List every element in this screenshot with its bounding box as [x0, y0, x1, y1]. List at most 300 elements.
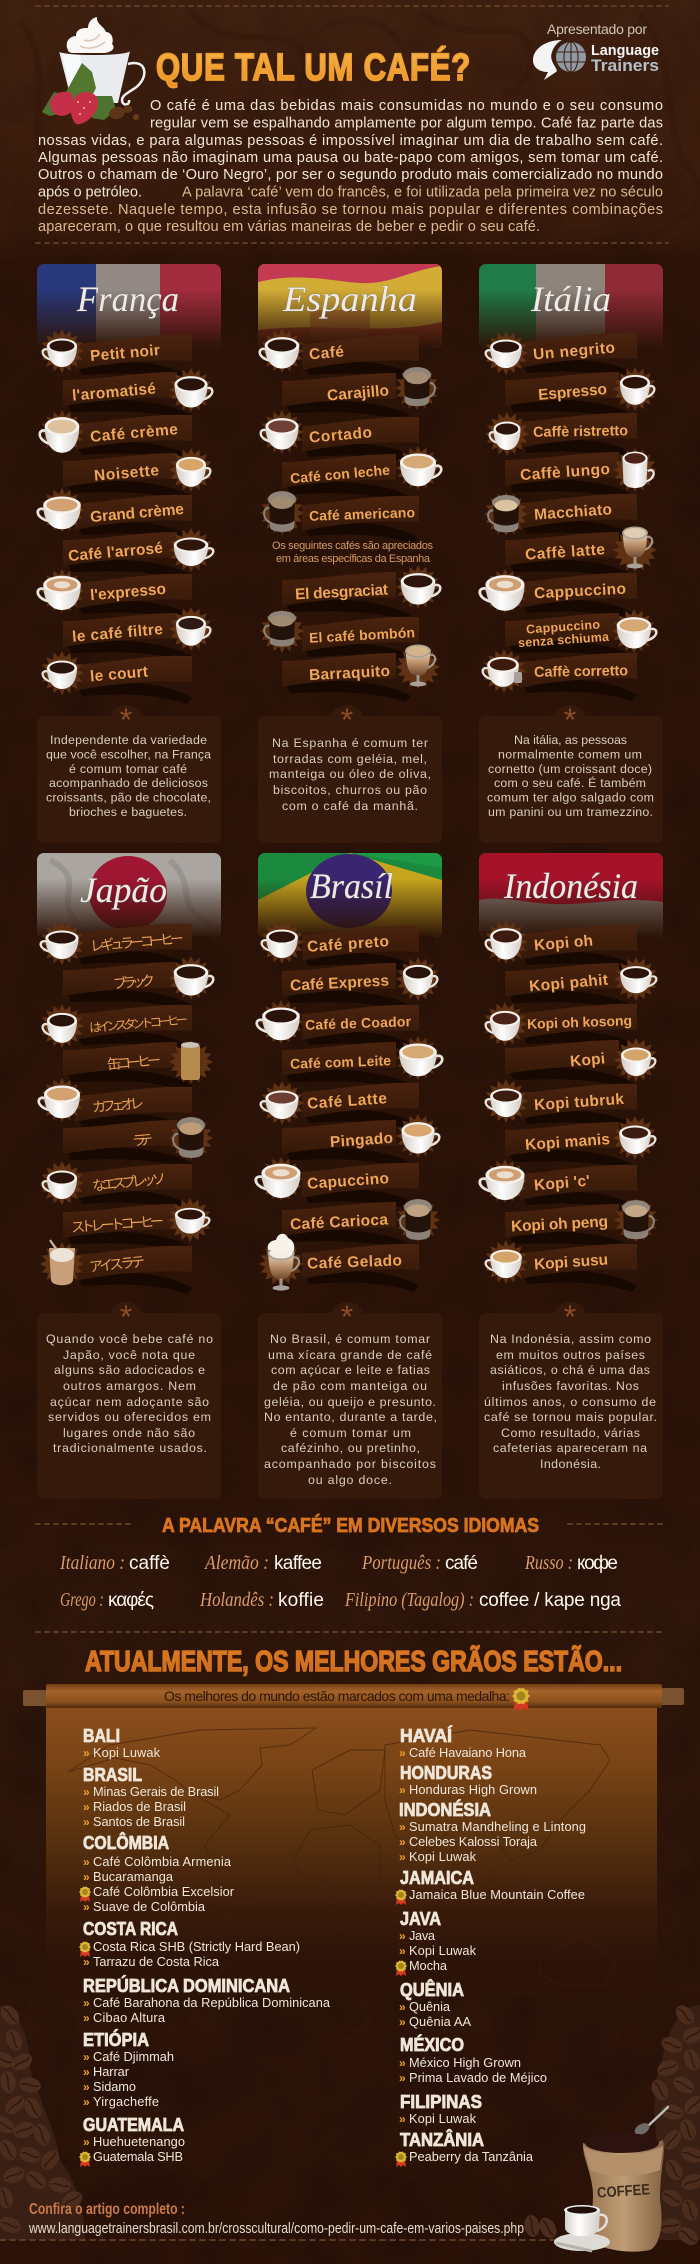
- list: left column: »: [83, 1996, 90, 2010]
- world map outline: [68, 1728, 616, 1985]
- list: left column: Costa Rica SHB (Strictly Hard Bean): [93, 1939, 300, 1954]
- list: left column: Huehuetenango: [93, 2134, 185, 2149]
- intro text: A palavra ‘café’ vem do francês, e foi utilizada pela primeira vez no século: [182, 184, 663, 200]
- list: left column: Santos de Brasil: [93, 1814, 185, 1829]
- note: cafés regionais da Espanha: [272, 540, 434, 565]
- description box: Indonésia: [479, 1299, 663, 1499]
- row: Cortado: Cortado: [308, 424, 373, 447]
- description box: Brasil: cafézinho, ou pretinho,: [281, 1441, 420, 1455]
- row: Café Latte: [260, 1081, 419, 1131]
- list: left column: GUATEMALA: [83, 2115, 184, 2135]
- description box: Japão: *: [120, 1299, 132, 1335]
- word list: café in other languages: café: [445, 1553, 478, 1574]
- row: アイス ラテ: アイス ラテ: [88, 1253, 146, 1275]
- description box: Brasil: No entanto, durante a tarde,: [264, 1410, 437, 1424]
- list: right column: Celebes Kalossi Toraja: [409, 1834, 538, 1849]
- list: right column: »: [399, 1929, 406, 1943]
- note: cafés regionais da Espanha: Os seguintes cafés são apreciados: [272, 540, 434, 552]
- word list: café in other languages: [59, 1552, 621, 1611]
- word list: café in other languages: кофе: [577, 1553, 618, 1574]
- sponsor label: Apresentado por: [547, 21, 647, 37]
- description box: Indonésia: café se tornou mais popular.: [484, 1410, 657, 1424]
- row: Kopi pahit: Kopi pahit: [528, 972, 609, 995]
- list: right column: Peaberry da Tanzânia: [409, 2149, 534, 2164]
- word list: café in other languages: Russo :: [524, 1552, 573, 1574]
- icon: coffee cup with cream and strawberries: [42, 17, 144, 124]
- row: Café Carioca: Café Carioca: [290, 1211, 389, 1234]
- row: Café: Café: [308, 343, 345, 363]
- list: left column: Harrar: [93, 2064, 130, 2079]
- word list: café in other languages: Italiano :: [59, 1552, 125, 1574]
- row: Caffè corretto: Caffè corretto: [534, 663, 628, 681]
- row: Kopi manis: [505, 1116, 657, 1171]
- list: right column: »: [399, 2056, 406, 2070]
- list: right column: »: [399, 1746, 406, 1760]
- panel: Indonésia: [479, 853, 663, 1499]
- row: ブラック: [63, 956, 213, 1011]
- row: Cappuccino: Cappuccino: [534, 581, 626, 602]
- row: Capuccino: [256, 1157, 419, 1211]
- description box: Indonésia: asiáticos, o chá é uma das: [490, 1363, 650, 1377]
- call to action: Confira o artigo completo :: [29, 2201, 185, 2218]
- row: カフェオレ: [39, 1078, 192, 1135]
- row: Café con leche: [282, 446, 441, 503]
- row: le court: le court: [89, 664, 149, 685]
- description box: Brasil: é comum tomar um: [290, 1426, 411, 1440]
- row: Café Latte: Café Latte: [307, 1090, 388, 1113]
- list: right column: MÉXICO: [400, 2034, 464, 2055]
- word list: café in other languages: coffee / kape nga: [479, 1590, 621, 1611]
- description box: Itália: normalmente comem um: [498, 748, 642, 762]
- word list: café in other languages: kaffee: [274, 1553, 322, 1574]
- list: right column: »: [399, 2000, 406, 2014]
- list: right column: [395, 1725, 586, 2167]
- description box: Brasil: [258, 1299, 442, 1499]
- row: Café de Coador: Café de Coador: [305, 1013, 412, 1033]
- description box: Espanha: Na Espanha é comum ter: [272, 736, 428, 750]
- icon: medal: [512, 1688, 530, 1711]
- row: Grand crème: Grand crème: [89, 501, 185, 526]
- row: El desgraciat: El desgraciat: [295, 582, 388, 603]
- intro text: Algumas pessoas não imaginam uma pausa ou bate-papo com amigos, sem tomar um café.: [38, 150, 663, 166]
- row: Café com Leite: [282, 1036, 442, 1091]
- panel: Japão: [37, 853, 221, 1499]
- list: left column: Café Djimmah: [93, 2049, 174, 2064]
- list: right column: HONDURAS: [400, 1763, 492, 1783]
- list: left column: »: [83, 1800, 90, 1814]
- list: right column: Kopi Luwak: [409, 1849, 477, 1864]
- row: 缶コーヒー: [63, 1040, 213, 1091]
- row: レギュラーコーヒー: [40, 921, 192, 972]
- list: right column: Kopi Luwak: [409, 2111, 477, 2126]
- description box: França: que você escolher, na França: [46, 748, 211, 762]
- list: left column: REPÚBLICA DOMINICANA: [83, 1975, 290, 1996]
- row: Capuccino: Capuccino: [307, 1170, 390, 1193]
- icon: coffee cup on saucer: [554, 2205, 610, 2251]
- description box: Japão: outros amargos. Nem: [63, 1379, 196, 1393]
- row: Espresso: [505, 367, 657, 421]
- word list: café in other languages: Grego :: [60, 1589, 104, 1611]
- scroll with world map: [23, 1684, 684, 1996]
- intro text: nossas vidas, e para algumas pessoas é impossível imaginar um dia de trabalho sem café.: [38, 133, 663, 149]
- row: Petit noir: [40, 329, 192, 383]
- coffee beans: right pile: [523, 2002, 700, 2249]
- description box: Indonésia: Como resultado, várias: [501, 1426, 640, 1440]
- description box: Itália: um panini ou um tramezzino.: [488, 805, 653, 819]
- row: Café: [260, 329, 419, 383]
- description box: França: brioches e baguetes.: [69, 805, 187, 819]
- row: Kopi: Kopi: [569, 1050, 606, 1070]
- list: left column: [79, 1726, 331, 2167]
- row: Kopi oh kosong: [483, 1002, 637, 1052]
- word list: café in other languages: Português :: [361, 1552, 441, 1574]
- row: Café l'arrosé: [63, 528, 213, 581]
- row: Café crème: Café crème: [89, 421, 179, 446]
- row: Caffè corretto: [482, 649, 637, 701]
- description box: Japão: lugares onde não são: [63, 1426, 195, 1440]
- flag: Brasil: [258, 853, 442, 937]
- list: left column: Guatemala SHB: [93, 2149, 183, 2164]
- row: Petit noir: Petit noir: [89, 342, 161, 365]
- list: right column: Honduras High Grown: [409, 1782, 537, 1797]
- list: right column: »: [399, 2015, 406, 2029]
- list: left column: »: [83, 2011, 90, 2025]
- heading: Espanha: Espanha: [282, 279, 417, 319]
- description box: Espanha: manteiga ou óleo de oliva,: [269, 767, 431, 781]
- word list: café in other languages: Alemão :: [203, 1552, 269, 1574]
- description box: Japão: Quando você bebe café no: [46, 1332, 213, 1346]
- description box: Itália: [479, 702, 663, 843]
- word list: café in other languages: koffie: [278, 1590, 324, 1611]
- row: なエスプレッソ: [40, 1161, 192, 1212]
- list: right column: Sumatra Mandheling e Lintong: [409, 1819, 586, 1834]
- row: ラテ: ラテ: [131, 1131, 154, 1149]
- dotted line: header top: [36, 5, 668, 7]
- list: right column: »: [399, 1783, 406, 1797]
- list: left column: Café Colômbia Armenia: [93, 1854, 232, 1869]
- description box: Indonésia: últimos anos, o consumo de: [484, 1395, 656, 1409]
- list: left column: »: [83, 1955, 90, 1969]
- row: Café preto: [260, 920, 419, 974]
- row: Caffè ristretto: [485, 412, 637, 461]
- description box: Indonésia: Na Indonésia, assim como: [490, 1332, 651, 1346]
- heading: Brasil: Brasíl: [310, 866, 393, 906]
- row: Café Gelado: Café Gelado: [307, 1252, 402, 1273]
- row: Carajillo: Carajillo: [326, 382, 390, 405]
- heading: França: França: [76, 279, 179, 319]
- logo: Language Trainers: Language: [591, 42, 659, 59]
- coffee beans: left pile: [0, 2002, 85, 2240]
- row: Café americano: Café americano: [309, 504, 415, 524]
- word list: café in other languages: Holandês :: [199, 1589, 274, 1611]
- scroll caption: Os melhores do mundo estão marcados com uma medalha:: [164, 1688, 510, 1704]
- intro text: regular vem se espalhando amplamente por algum tempo. Café faz parte das: [150, 116, 663, 132]
- flag: França: [37, 264, 221, 348]
- row: le café filtre: le café filtre: [71, 621, 164, 646]
- word list: café in other languages: caffè: [129, 1553, 170, 1574]
- list: right column: QUÊNIA: [400, 1979, 464, 2000]
- row: ストレートコーヒー: ストレートコーヒー: [71, 1213, 164, 1235]
- list: right column: Prima Lavado de Méjico: [409, 2070, 547, 2085]
- list: left column: »: [83, 1855, 90, 1869]
- row: なエスプレッソ: なエスプレッソ: [91, 1170, 167, 1194]
- row: Grand crème: [38, 488, 192, 543]
- list: left column: »: [83, 1785, 90, 1799]
- row: Kopi 'c': [480, 1159, 637, 1213]
- description box: Japão: açúcar nem adoçante são: [50, 1395, 209, 1409]
- row: Pingado: [282, 1114, 440, 1169]
- row: Kopi oh peng: Kopi oh peng: [511, 1213, 608, 1235]
- row: Café con leche: Café con leche: [289, 462, 391, 486]
- description box: Japão: alguns são adocicados e: [54, 1363, 205, 1377]
- list: left column: Riados de Brasil: [93, 1799, 186, 1814]
- list: left column: »: [83, 2065, 90, 2079]
- row: Caffè latte: [505, 526, 657, 581]
- panel: França: [37, 264, 221, 843]
- row: Noisette: [63, 448, 213, 502]
- row: Cappuccino senza schiuma: [505, 609, 656, 662]
- description box: França: Independente da variedade: [50, 733, 207, 747]
- row: Noisette: Noisette: [93, 462, 160, 485]
- description box: Brasil: uma xícara grande de café: [268, 1348, 432, 1362]
- description box: Indonésia: infusões favoritas. Nos: [502, 1379, 639, 1393]
- title: QUE TAL UM CAFÉ?: [156, 45, 471, 89]
- row: Espresso: Espresso: [537, 381, 608, 404]
- flag: Indonésia: [479, 853, 663, 937]
- list: left column: »: [83, 2135, 90, 2149]
- row: ブラック: ブラック: [112, 972, 156, 992]
- description box: Brasil: com açúcar e leite e fatias: [271, 1363, 430, 1377]
- description box: França: acompanhado de deliciosos: [49, 776, 208, 790]
- icon: coffee sack: [583, 2107, 668, 2252]
- list: left column: »: [83, 1815, 90, 1829]
- word list: café in other languages: καφές: [108, 1590, 154, 1611]
- row: Macchiato: Macchiato: [534, 501, 613, 524]
- list: left column: Sidamo: [93, 2079, 136, 2094]
- row: Café Gelado: [259, 1234, 419, 1292]
- heading: Indonésia: Indonésia: [503, 866, 638, 906]
- row: Café de Coador: [257, 1000, 419, 1053]
- row: Kopi pahit: [505, 957, 658, 1012]
- row: ラテ: [63, 1116, 213, 1169]
- list: right column: »: [399, 1850, 406, 1864]
- description box: Itália: com o seu café. É também: [494, 775, 646, 790]
- description box: Espanha: [258, 702, 442, 843]
- row: Macchiato: [484, 492, 637, 542]
- list: left column: Café Barahona da República Dominicana: [93, 1995, 331, 2010]
- row: Barraquito: [282, 644, 440, 702]
- row: El café bombón: El café bombón: [309, 624, 415, 646]
- list: left column: Tarrazu de Costa Rica: [93, 1954, 220, 1969]
- list: right column: México High Grown: [409, 2055, 521, 2070]
- list: left column: »: [83, 1900, 90, 1914]
- list: right column: Café Havaiano Hona: [409, 1745, 527, 1760]
- logo: Language Trainers: [533, 40, 659, 80]
- list: right column: »: [399, 1820, 406, 1834]
- row: l'expresso: [38, 569, 192, 622]
- row: l'aromatisé: [63, 368, 213, 421]
- note: cafés regionais da Espanha: em áreas específicas da Espanha: [276, 553, 431, 565]
- description box: Brasil: geléia, ou queijo e presunto.: [264, 1395, 436, 1409]
- description box: Indonésia: cafeterias apareceram na: [493, 1441, 647, 1455]
- description box: Espanha: com o café da manhã.: [282, 799, 418, 813]
- description box: França: [37, 702, 221, 843]
- list: left column: Suave de Colômbia: [93, 1899, 206, 1914]
- row: Café Express: Café Express: [290, 972, 389, 995]
- row: Kopi 'c': Kopi 'c': [533, 1173, 591, 1194]
- list: right column: INDONÉSIA: [399, 1799, 491, 1820]
- list: left column: BRASIL: [83, 1765, 142, 1785]
- row: はインスタントコーヒー: [40, 1004, 192, 1053]
- description box: Japão: tradicionalmente usados.: [53, 1441, 207, 1455]
- list: left column: »: [83, 2080, 90, 2094]
- description box: Itália: *: [564, 702, 576, 738]
- description box: Japão: servidos ou oferecidos em: [48, 1410, 211, 1424]
- dotted line: header bottom: [36, 242, 668, 244]
- list: left column: ETIÓPIA: [83, 2029, 149, 2050]
- row: Kopi oh peng: [505, 1198, 658, 1253]
- word list: café in other languages: Filipino (Tagalog) :: [344, 1589, 474, 1611]
- row: Café l'arrosé: Café l'arrosé: [67, 540, 164, 565]
- intro text: após o petróleo.: [38, 184, 142, 200]
- row: Kopi oh kosong: Kopi oh kosong: [527, 1012, 632, 1032]
- row: le café filtre: [63, 607, 213, 662]
- list: left column: BALI: [83, 1726, 120, 1746]
- list: left column: Kopi Luwak: [93, 1745, 161, 1760]
- list: right column: »: [399, 1944, 406, 1958]
- description box: Brasil: acompanhado por biscoitos: [264, 1457, 436, 1471]
- header swirl pattern: [20, 10, 699, 240]
- row: Café americano: [260, 491, 419, 544]
- row: Carajillo: [282, 366, 439, 422]
- row: Cappuccino senza schiuma: Cappuccino: [526, 617, 601, 637]
- row: El desgraciat: [282, 565, 440, 621]
- description box: Brasil: ou algo doce.: [308, 1473, 392, 1487]
- row: レギュラーコーヒー: レギュラーコーヒー: [89, 930, 185, 954]
- description box: França: *: [120, 702, 132, 738]
- heading: Japão: Japão: [80, 870, 167, 910]
- row: Kopi susu: [484, 1240, 637, 1292]
- flag: Japão: [37, 853, 221, 937]
- list: right column: Quênia: [409, 1999, 451, 2014]
- row: Caffè ristretto: Caffè ristretto: [533, 423, 628, 441]
- list: right column: Quênia AA: [409, 2014, 471, 2029]
- row: Pingado: Pingado: [330, 1130, 394, 1151]
- row: Kopi oh: [484, 920, 637, 973]
- panel: Espanha: [258, 264, 442, 843]
- list: right column: HAVAÍ: [400, 1725, 453, 1746]
- row: Kopi oh: Kopi oh: [533, 932, 594, 954]
- list: left column: Yirgacheffe: [93, 2094, 159, 2109]
- description box: Espanha: *: [341, 702, 353, 738]
- description box: Brasil: de pão com manteiga ou: [273, 1379, 427, 1393]
- description box: Indonésia: Indonésia.: [540, 1457, 601, 1471]
- row: l'aromatisé: l'aromatisé: [71, 380, 157, 405]
- list: right column: FILIPINAS: [400, 2092, 482, 2112]
- list: left column: COSTA RICA: [83, 1919, 178, 1939]
- list: right column: JAMAICA: [400, 1868, 474, 1888]
- list: left column: Bucaramanga: [93, 1869, 174, 1884]
- description box: Brasil: No Brasil, é comum tomar: [270, 1332, 430, 1346]
- description box: Itália: cornetto (um croissant doce): [488, 762, 652, 776]
- list: right column: TANZÂNIA: [400, 2129, 484, 2150]
- row: Café crème: [40, 410, 192, 463]
- list: right column: Java: [409, 1928, 436, 1943]
- list: left column: COLÔMBIA: [83, 1832, 169, 1853]
- description box: Espanha: torradas com geléia, mel,: [273, 752, 427, 766]
- description box: Itália: Na itália, as pessoas: [514, 733, 627, 747]
- description box: Japão: [37, 1299, 221, 1499]
- row: Cappuccino: [480, 569, 637, 621]
- list: left column: Minas Gerais de Brasil: [93, 1784, 219, 1799]
- intro text: apareceram, o que resultou em várias maneiras de beber e pedir o seu café.: [38, 219, 540, 235]
- row: le court: [40, 651, 192, 704]
- row: Kopi tubruk: [484, 1079, 637, 1132]
- flag: Itália: [479, 264, 663, 348]
- row: Cappuccino senza schiuma: senza schiuma: [518, 630, 610, 650]
- heading: a palavra café em diversos idiomas: A PALAVRA “CAFÉ” EM DIVERSOS IDIOMAS: [162, 1514, 539, 1537]
- row: アイス ラテ: [40, 1240, 192, 1294]
- row: Caffè lungo: [505, 448, 657, 501]
- row: Kopi: [505, 1038, 658, 1089]
- description box: Japão: Japão, você nota que: [63, 1348, 195, 1362]
- row: ストレートコーヒー: [63, 1198, 212, 1253]
- intro text: Outros o chamam de ‘Ouro Negro’, por ser o segundo produto mais comercializado no mundo: [38, 167, 663, 183]
- row: Barraquito: Barraquito: [309, 663, 390, 684]
- row: Café Express: [282, 957, 440, 1012]
- description box: Indonésia: *: [564, 1299, 576, 1335]
- row: 缶コーヒー: 缶コーヒー: [106, 1052, 162, 1072]
- row: Café preto: Café preto: [307, 933, 390, 956]
- row: Un negrito: [484, 331, 637, 381]
- parchment: [46, 1706, 657, 1996]
- row: l'expresso: l'expresso: [89, 581, 167, 604]
- list: left column: »: [83, 2050, 90, 2064]
- scroll rod: [23, 1690, 47, 1706]
- panel: Brasil: [256, 853, 442, 1499]
- description box: Brasil: *: [341, 1299, 353, 1335]
- list: right column: »: [399, 1835, 406, 1849]
- row: Café Carioca: [282, 1198, 440, 1251]
- article URL: www.languagetrainersbrasil.com.br/crosscultural/como-pedir-um-cafe-em-varios-paises.php: [28, 2220, 524, 2237]
- row: Caffè lungo: Caffè lungo: [520, 461, 611, 484]
- flag: Espanha: [258, 264, 442, 348]
- intro text: dezessete. Naquele tempo, esta infusão se tornou mais popular e diferentes combinações: [38, 202, 663, 218]
- row: Kopi tubruk: Kopi tubruk: [534, 1091, 625, 1114]
- list: left column: Cibao Altura: [93, 2010, 166, 2025]
- list: right column: Mocha: [409, 1958, 448, 1973]
- row: Cortado: [260, 410, 419, 465]
- description box: Itália: comum ter algo salgado com: [487, 790, 654, 804]
- row: Café com Leite: Café com Leite: [290, 1052, 391, 1072]
- row: Kopi manis: Kopi manis: [525, 1131, 611, 1154]
- icon: coffee sack: COFFEE: [597, 2181, 651, 2202]
- heading: Itália: Itália: [530, 279, 611, 319]
- list: left column: »: [83, 2095, 90, 2109]
- row: Kopi susu: Kopi susu: [534, 1251, 609, 1274]
- list: left column: »: [83, 1870, 90, 1884]
- list: left column: »: [83, 1746, 90, 1760]
- row: Un negrito: Un negrito: [532, 339, 616, 364]
- list: right column: Kopi Luwak: [409, 1943, 477, 1958]
- row: El café bombón: [260, 609, 419, 665]
- list: right column: JAVA: [400, 1909, 441, 1929]
- list: right column: Jamaica Blue Mountain Coffee: [409, 1887, 585, 1902]
- panel: Itália: [479, 264, 663, 843]
- list: right column: »: [399, 2071, 406, 2085]
- description box: França: croissants, pão de chocolate,: [46, 790, 211, 804]
- description box: França: é comum tomar café: [69, 762, 187, 776]
